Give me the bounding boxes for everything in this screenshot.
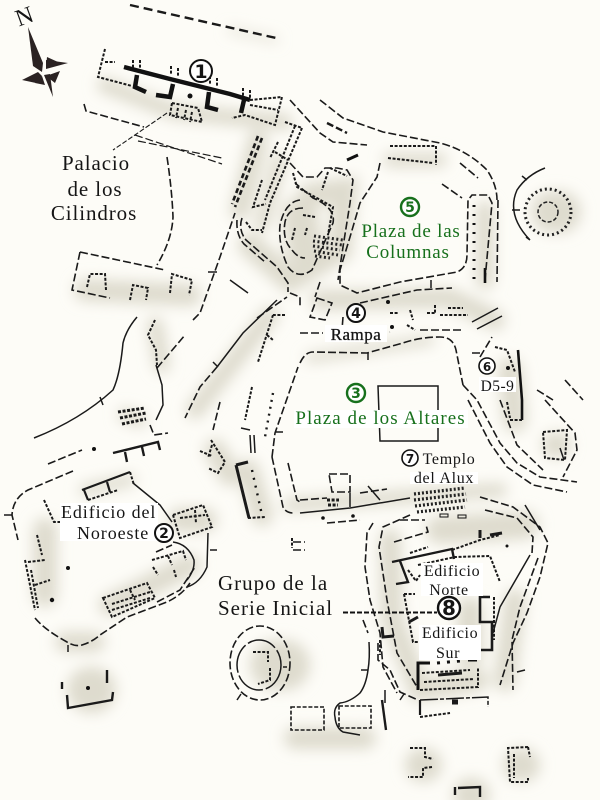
label: Rampa: Rampa [331,325,381,344]
number 7 marker [402,450,418,466]
label: Grupo de la Serie Inicial: Serie Inicial [218,596,333,620]
number 6 marker: 6 [483,360,491,374]
number 4 marker [347,304,365,322]
building complex south [418,660,488,717]
bottom buildings [408,747,530,797]
central buildings [200,315,350,550]
southern squares and road [291,620,418,735]
number 1 marker [190,60,212,83]
Edificio structures [380,530,508,655]
number 5 marker: 5 [405,200,415,216]
label: Plaza de las Columnas [361,221,461,263]
label: Grupo de la Serie Inicial [218,571,333,620]
mound with contour lines [232,122,343,292]
ring structure [230,626,290,700]
roads and dashed outlines [34,100,583,693]
N letter: N [12,2,37,32]
label: Templo del Alux: del Alux [414,470,474,487]
label: Grupo de la Serie Inicial: Grupo de la [218,571,328,595]
D5-9 building [495,347,567,460]
label: Palacio de los Cilindros [51,151,137,225]
small square building [310,298,332,320]
label: Templo del Alux: Templo [423,451,475,468]
leader to group 8 [343,612,437,614]
number 7 marker: 7 [406,452,414,466]
number 2 marker [155,524,173,542]
number 2 marker: 2 [159,526,169,542]
label: D5-9: D5-9 [481,378,514,395]
label: Edificio del Noroeste [60,502,158,543]
label: Edificio Sur: Edificio [422,625,478,642]
top dashed line [130,5,276,38]
number 8 marker: 8 [442,596,456,620]
label: Palacio de los Cilindros: Palacio [62,151,130,175]
number 3 marker: 3 [351,386,361,402]
circular structure [512,168,571,240]
label: Plaza de las Columnas: Plaza de las [361,221,461,242]
label: Edificio Norte: Edificio [424,563,480,580]
number 3 marker [347,384,365,402]
label: Edificio Sur: Sur [436,645,460,662]
building 2 [25,505,217,652]
compass rose with north mark [12,2,68,97]
number 8 marker [438,596,460,620]
building north of Plaza de las Columnas [388,146,436,165]
label: Plaza de los Altares: Plaza de los Altares [295,408,466,429]
leader to Palacio [113,113,167,150]
number 5 marker [401,198,419,216]
number 6 marker [479,358,495,374]
label: Templo del Alux [410,451,478,487]
label: Edificio del Noroeste: Edificio del [61,502,156,522]
label: Edificio Norte [421,563,483,599]
number 1 marker: 1 [194,61,208,83]
label: Palacio de los Cilindros: Cilindros [51,201,137,225]
buildings west row [4,252,192,540]
building 1: Palacio de los Cilindros [84,49,282,164]
label: Edificio del Noroeste: Noroeste [77,523,149,543]
number 4 marker: 4 [351,306,361,322]
label: Palacio de los Cilindros: de los [68,177,122,201]
Plaza de los Altares platform [378,386,438,441]
label: Edificio Norte: Norte [429,582,469,599]
Templo del Alux structure [368,486,467,542]
label: Plaza de las Columnas: Columnas [366,242,450,263]
label: Edificio Sur [419,625,481,662]
rampa structures [257,282,468,335]
SW small building [62,670,113,708]
column row right of plaza [472,205,476,285]
